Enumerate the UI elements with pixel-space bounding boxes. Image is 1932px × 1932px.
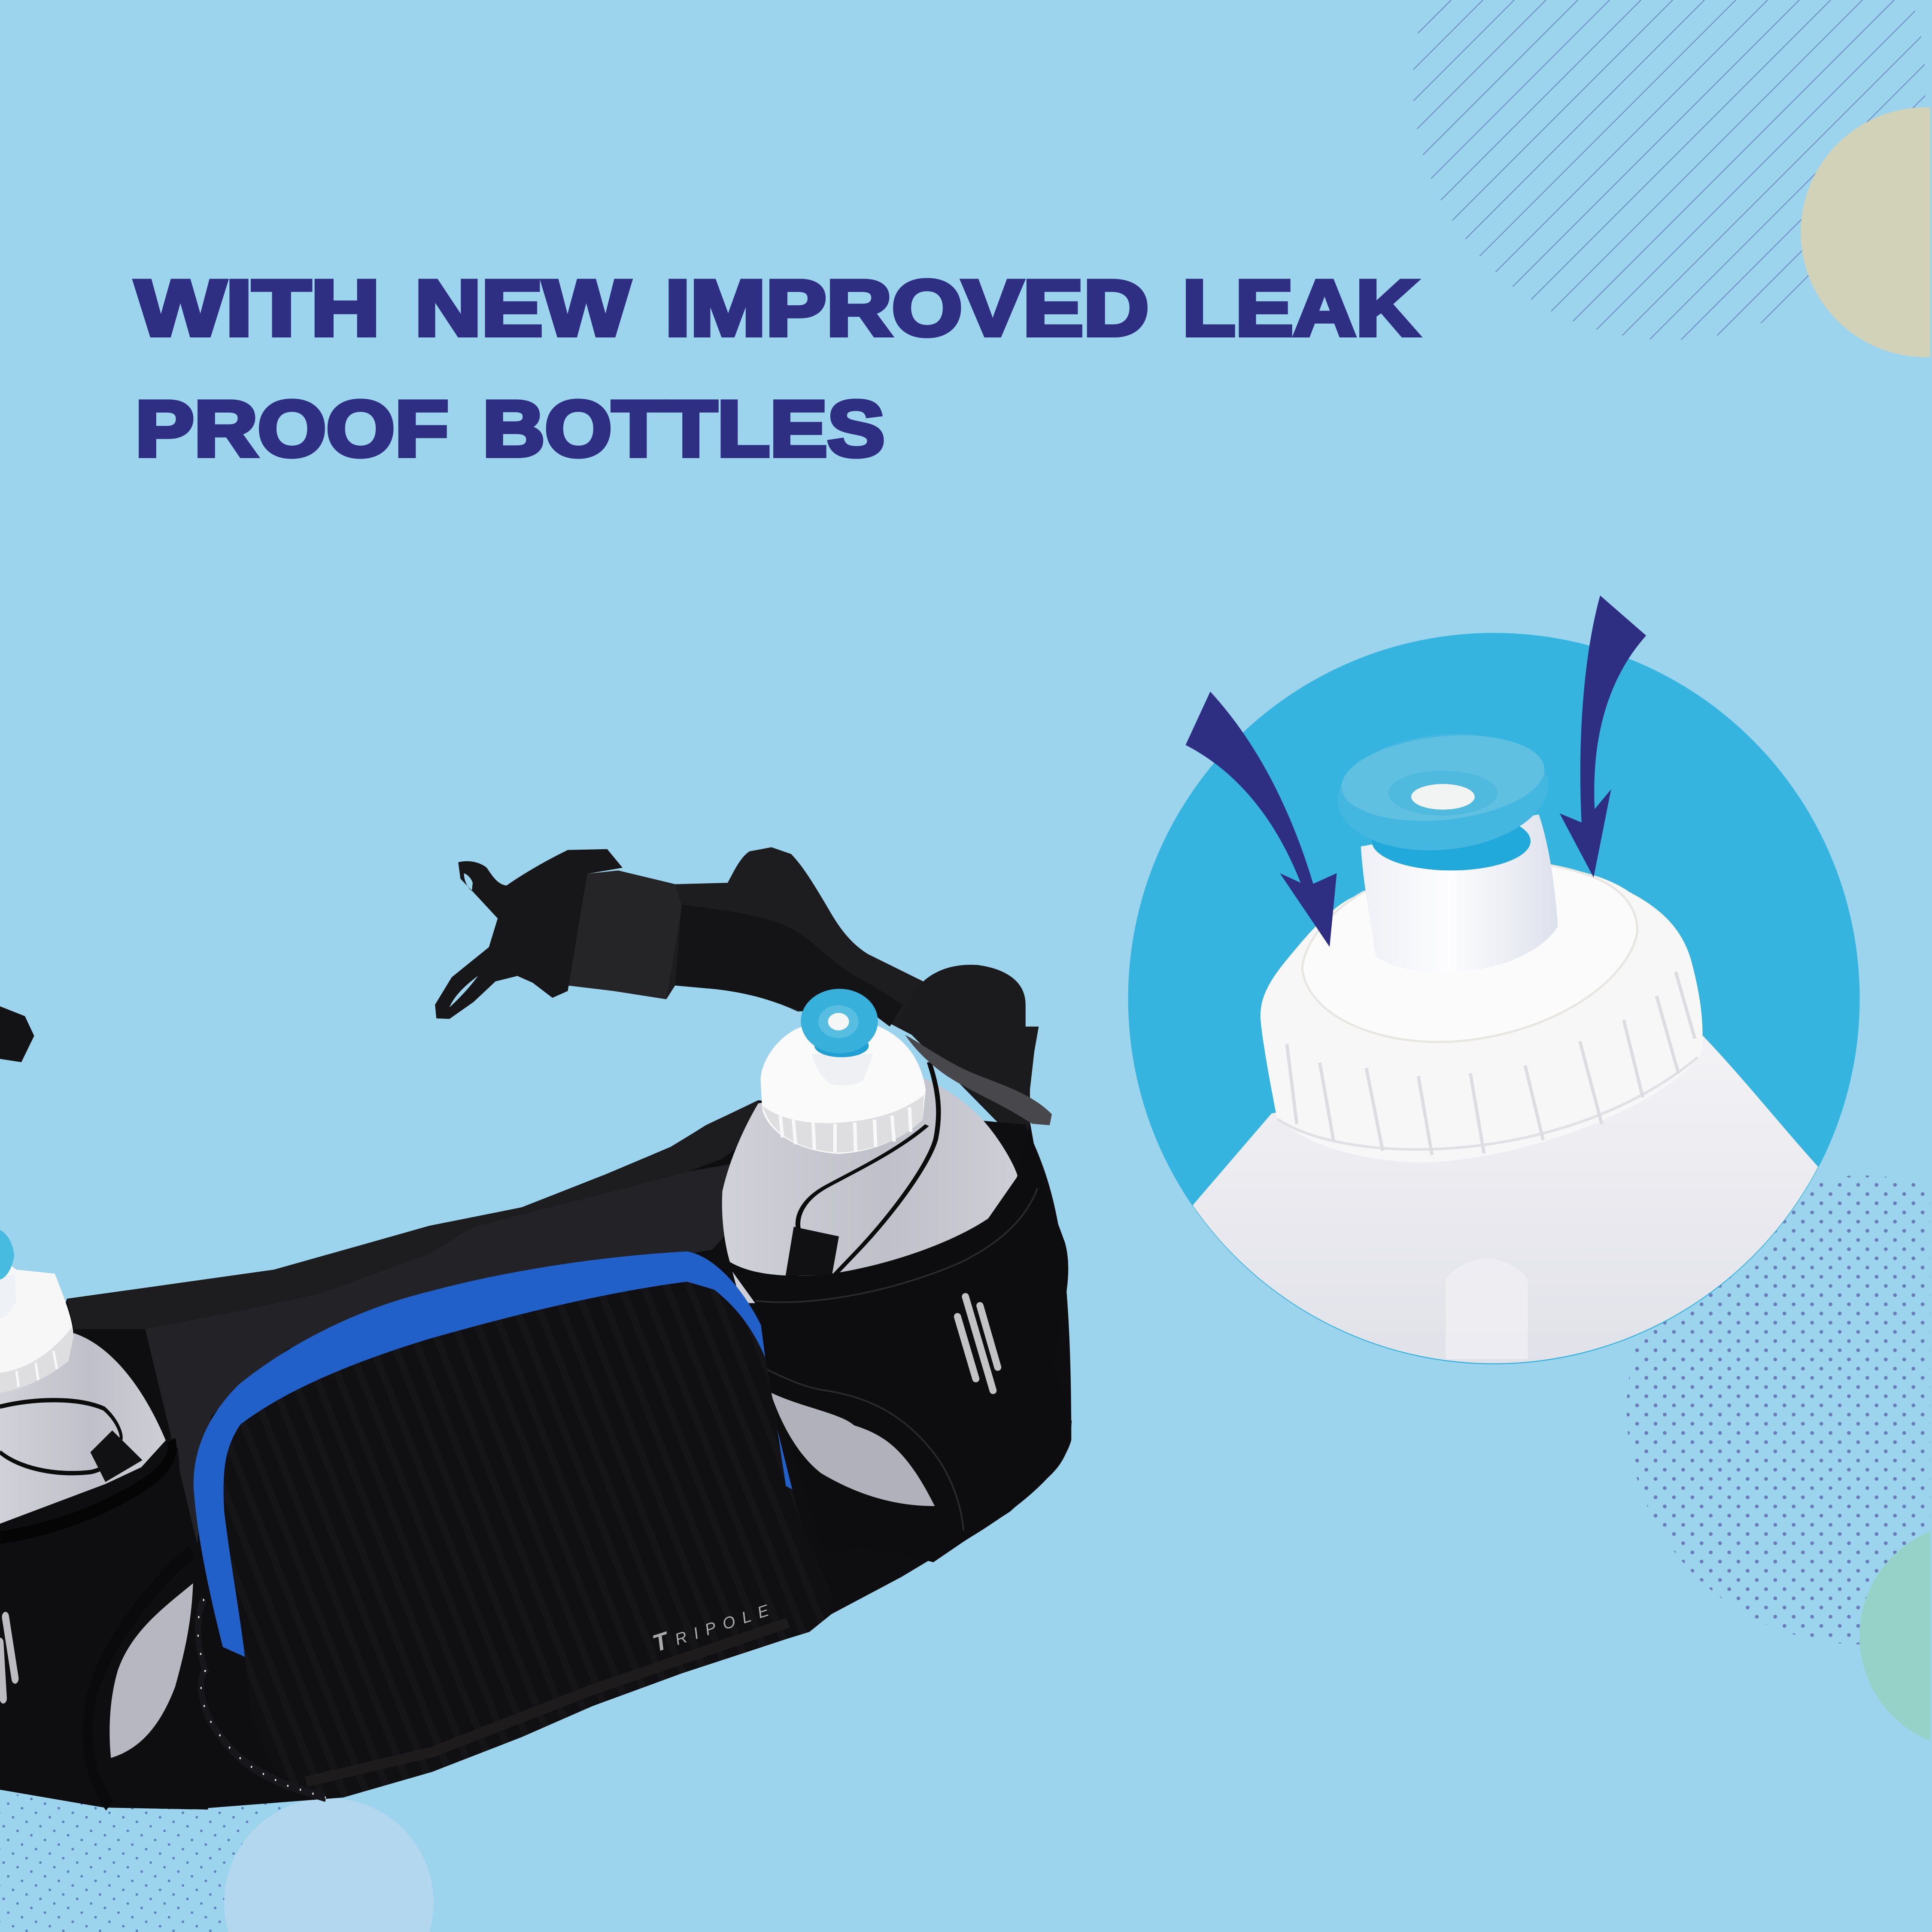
spout neck — [1361, 814, 1558, 972]
cap underside — [814, 1034, 869, 1057]
blue trim right sliver — [778, 1430, 792, 1489]
left arch band — [88, 1552, 191, 1806]
cap hole — [828, 1013, 849, 1030]
arrow: right — [1560, 595, 1646, 878]
top hem — [67, 1100, 764, 1329]
front pocket — [194, 1252, 832, 1798]
bottle body — [722, 1078, 1019, 1303]
right pocket — [720, 1122, 1072, 1562]
ribbed webbing band — [568, 871, 682, 999]
pocket face — [224, 1282, 832, 1798]
strap back layer — [568, 847, 978, 1035]
belt main silhouette — [0, 1100, 1071, 1809]
left cord tab — [90, 1431, 143, 1482]
running belt product photo — [0, 847, 1072, 1810]
reflective marks right — [957, 1297, 998, 1391]
plastic buckle — [435, 849, 623, 1019]
rib band — [763, 1095, 924, 1152]
left bottle collar — [0, 1258, 73, 1393]
title line 2: BOTTLES — [483, 384, 885, 473]
title — [135, 264, 1419, 473]
left window — [109, 1583, 193, 1758]
title line 1: LEAK — [1182, 264, 1419, 352]
right bottle — [722, 989, 1052, 1303]
decor: light blue circle — [224, 1798, 434, 1932]
collar ribs — [780, 1107, 911, 1152]
blue cap underside — [1372, 812, 1531, 871]
grey pull tab — [905, 1035, 1052, 1125]
title line 1: IMPROVED — [665, 264, 1149, 352]
pocket shell — [720, 1122, 1072, 1562]
collar ribs — [1287, 972, 1695, 1155]
back panel and hem — [67, 1100, 764, 1543]
left bottle cap — [0, 1230, 14, 1279]
left pocket shell — [0, 1440, 208, 1810]
elastic cords — [798, 1062, 939, 1281]
buckle and strap — [435, 847, 1039, 1155]
blue zipper trim — [194, 1252, 765, 1657]
left pocket rim — [0, 1440, 172, 1537]
brand logo: TRIPOLE — [649, 1594, 772, 1657]
drawstring cord — [198, 1599, 326, 1798]
cap top face — [1337, 726, 1549, 830]
blue cap — [1332, 724, 1554, 860]
elastic strap — [675, 905, 903, 1027]
cap — [801, 989, 878, 1054]
lower bottle window — [771, 1392, 935, 1506]
left bottle ribs — [16, 1351, 57, 1387]
reflective marks left — [0, 1617, 15, 1698]
blue circle backdrop — [1128, 633, 1860, 1364]
screw collar — [1261, 865, 1703, 1163]
bottle body — [1193, 1036, 1818, 1363]
decor: dotted circle bottom left — [0, 1795, 429, 1932]
decor: diagonal line pattern — [1413, 0, 1925, 340]
spout neck — [812, 1054, 873, 1085]
title line 1: NEW — [415, 264, 630, 352]
bottle close-up callout — [1128, 595, 1860, 1364]
left bottle rib band — [0, 1327, 73, 1393]
inner dome — [1302, 865, 1637, 1042]
left bottle body — [0, 1333, 166, 1524]
title line 2 — [135, 384, 885, 473]
cap inner ring — [1388, 771, 1498, 815]
cord tab — [786, 1227, 839, 1276]
title line 1: WITH — [135, 264, 380, 352]
gathered loop — [899, 965, 1039, 1155]
decor: tan circle — [1801, 107, 1930, 357]
bottle collar — [760, 1024, 926, 1154]
cap ring — [818, 1005, 859, 1038]
pocket lower edge sheen — [306, 1623, 788, 1782]
cap opening — [1411, 784, 1475, 810]
pocket rim seam — [755, 1188, 1037, 1302]
left buckle fragment — [0, 1006, 34, 1062]
decor: dotted circle right — [1627, 1176, 1932, 1644]
arrow: left — [1185, 692, 1337, 947]
left bottle cord — [0, 1400, 121, 1473]
title line 2: PROOF — [135, 384, 449, 473]
title line 1 — [135, 264, 1419, 352]
back panel fabric — [145, 1163, 739, 1543]
collar ridge line — [1277, 1057, 1698, 1149]
window arch seam — [766, 1369, 963, 1531]
left spout — [0, 1273, 16, 1318]
bottle highlight — [1446, 1259, 1528, 1359]
decor: green circle — [1859, 1531, 1930, 1741]
left bottle and pocket — [0, 1230, 208, 1810]
